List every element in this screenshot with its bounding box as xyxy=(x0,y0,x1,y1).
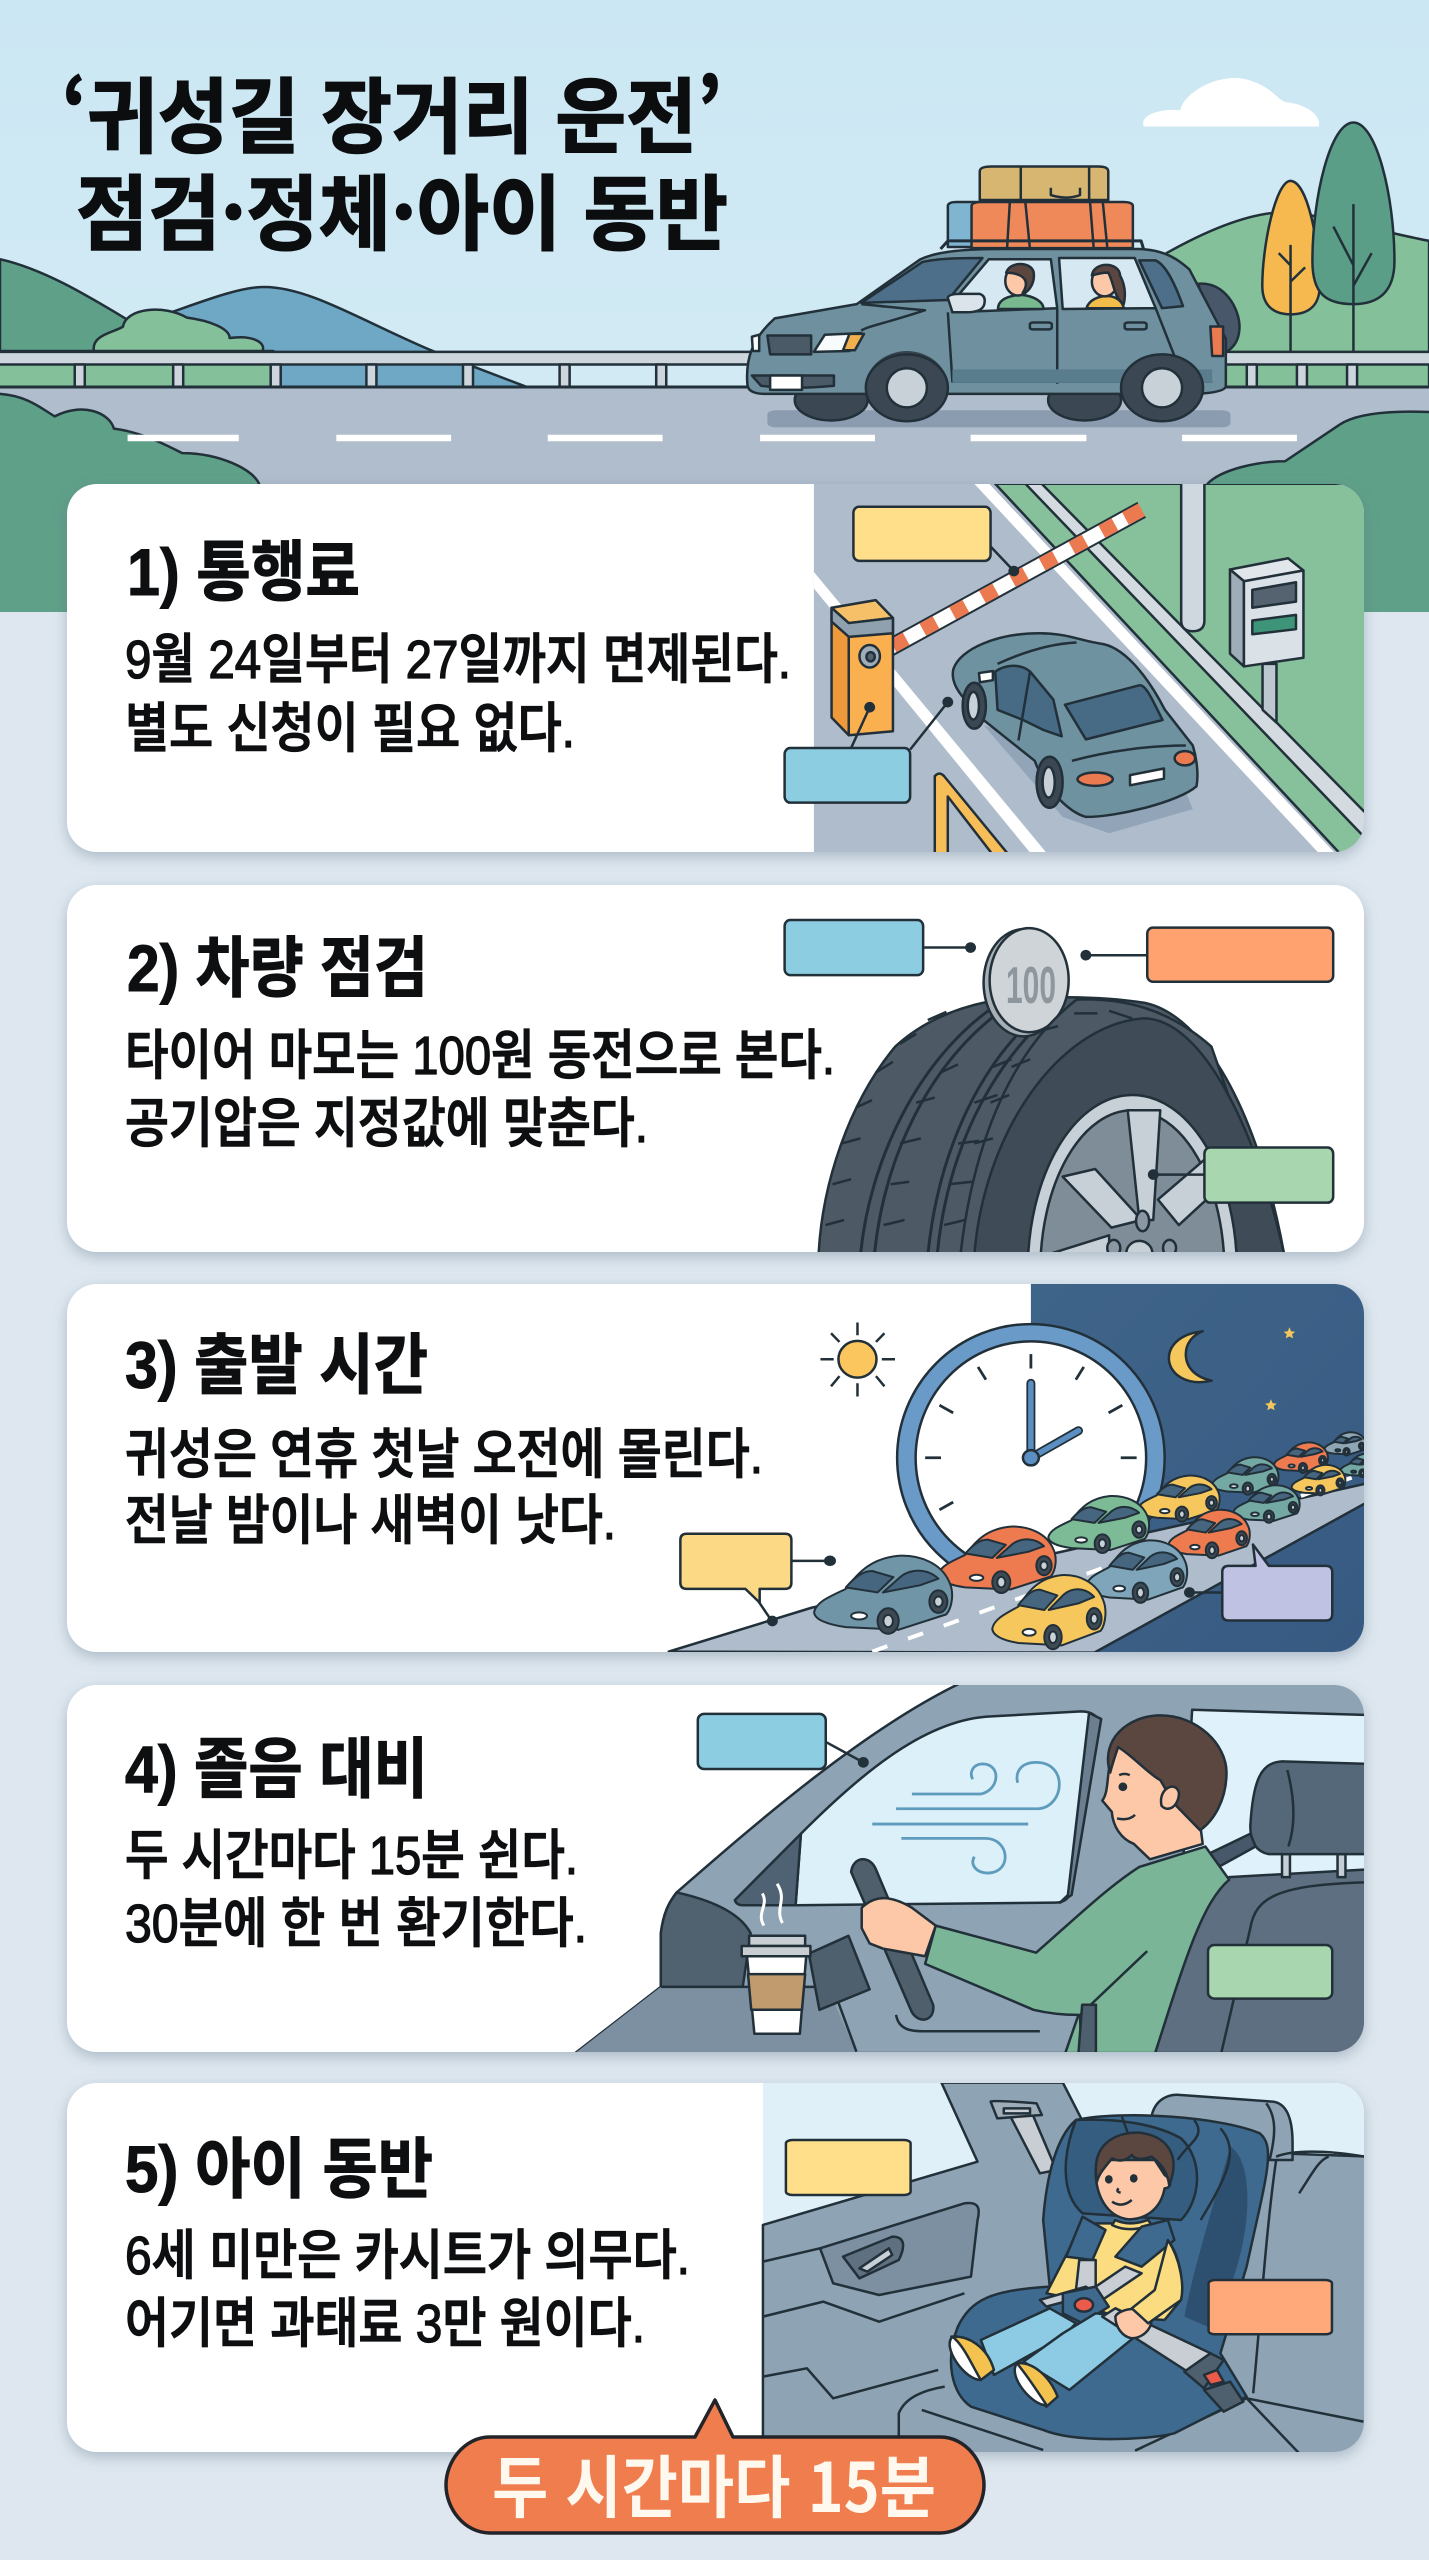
wind lines xyxy=(872,1762,1059,1873)
illustration: tire and coin xyxy=(783,918,1334,1252)
road xyxy=(0,388,1429,484)
label: blue xyxy=(785,920,923,975)
label: green xyxy=(1204,1148,1333,1203)
seat xyxy=(1155,1761,1367,2053)
kiosk xyxy=(1230,558,1303,723)
leader line xyxy=(826,1742,868,1766)
icon: moon xyxy=(1169,1331,1212,1382)
label: blue xyxy=(698,1714,826,1769)
callout: every two hours 15 minutes xyxy=(446,2400,984,2533)
side window xyxy=(1182,1710,1367,1887)
hand xyxy=(862,1898,936,1956)
tree: teal xyxy=(1312,122,1394,352)
body 3: 귀성은 연휴 첫날 오전에 몰린다. xyxy=(125,1425,763,1485)
wheel rim xyxy=(1028,1095,1237,1447)
clock xyxy=(897,1324,1165,1591)
coin value: 100 xyxy=(1006,957,1056,1015)
door panel xyxy=(763,2203,1247,2451)
title xyxy=(62,51,728,267)
panel 2: vehicle check xyxy=(61,884,1370,1263)
leader lines xyxy=(851,547,1018,750)
panel 1: toll fee xyxy=(67,480,1372,858)
body 5 xyxy=(125,2226,690,2354)
cabin xyxy=(575,1682,1367,2053)
bush: right foreground xyxy=(1208,412,1429,637)
tire shoulder and sidewall xyxy=(960,999,1284,1256)
illustration: toll gate and car xyxy=(785,480,1372,858)
bush: left foreground xyxy=(0,394,260,637)
lane dashes xyxy=(128,435,1297,441)
door and pillar xyxy=(763,2083,1371,2453)
icon: sun xyxy=(820,1323,895,1397)
shoulder belt xyxy=(991,2101,1056,2173)
body 3: 전날 밤이나 새벽이 낫다. xyxy=(125,1491,616,1551)
label: lavender speech bubble xyxy=(1185,1544,1332,1621)
coin xyxy=(984,928,1069,1036)
gate arm xyxy=(879,510,1142,654)
label: blue xyxy=(785,748,910,803)
cloud xyxy=(1143,78,1319,127)
guardrail xyxy=(0,352,1429,387)
car seat xyxy=(951,2115,1268,2439)
man xyxy=(925,1715,1229,2053)
rear headrest xyxy=(1151,2095,1293,2160)
heading 4: 4) 졸음 대비 xyxy=(125,1732,428,1806)
body 4: 두 시간마다 15분 쉰다. xyxy=(125,1826,578,1886)
label: orange xyxy=(1147,928,1333,982)
steering column xyxy=(809,1936,870,2010)
label: yellow speech bubble xyxy=(680,1534,835,1625)
person: driver xyxy=(998,264,1044,309)
panel 5: child passenger xyxy=(67,2083,1373,2453)
illustration: clock and traffic xyxy=(669,1284,1382,1654)
callout: every two hours 15 minutes: 두 시간마다 15분 xyxy=(492,2433,936,2532)
tire tread xyxy=(819,997,1284,1256)
icon: stars xyxy=(1265,1327,1295,1410)
gate post xyxy=(832,600,893,735)
title: 점검·정체·아이 동반 xyxy=(76,148,728,267)
illustration: child in car seat xyxy=(763,2083,1373,2453)
heading 2: 2) 차량 점검 xyxy=(127,931,428,1005)
heading 5: 5) 아이 동반 xyxy=(125,2132,433,2206)
body 5: 6세 미만은 카시트가 의무다. xyxy=(125,2226,690,2286)
car: family car with luggage xyxy=(747,167,1240,427)
coffee cup xyxy=(742,1884,810,2034)
steering wheel xyxy=(851,1859,933,2020)
panel 4: drowsiness xyxy=(67,1682,1367,2053)
body 4 xyxy=(125,1826,587,1954)
label: yellow xyxy=(853,507,991,561)
label: yellow xyxy=(786,2140,911,2195)
label: orange xyxy=(1209,2280,1332,2334)
sedan xyxy=(953,633,1197,833)
label: green xyxy=(1208,1945,1332,1999)
body 4: 30분에 한 번 환기한다. xyxy=(125,1894,587,1954)
traffic jam cars xyxy=(814,1432,1382,1649)
illustration: driver in car xyxy=(575,1682,1367,2053)
heading 1: 1) 통행료 xyxy=(127,535,360,609)
body 2: 공기압은 지정값에 맞춘다. xyxy=(125,1094,648,1154)
windshield xyxy=(796,1711,1100,1905)
road marking xyxy=(935,774,1008,854)
header scene: sky, hills, road and car xyxy=(0,0,1429,637)
body 1: 9월 24일부터 27일까지 면제된다. xyxy=(125,630,791,690)
body 2 xyxy=(125,1026,835,1154)
leader lines xyxy=(923,943,1204,1179)
heading 3: 3) 출발 시간 xyxy=(125,1328,428,1402)
road xyxy=(669,1479,1372,1653)
body 3 xyxy=(125,1425,763,1551)
dashboard xyxy=(661,1892,751,1987)
body 1 xyxy=(125,630,791,759)
tree: yellow xyxy=(1262,181,1320,352)
body 1: 별도 신청이 필요 없다. xyxy=(125,699,575,759)
pole xyxy=(1181,480,1204,631)
person: passenger xyxy=(1086,265,1125,308)
child xyxy=(950,2133,1243,2412)
body 2: 타이어 마모는 100원 동전으로 본다. xyxy=(125,1026,835,1086)
title: ‘귀성길 장거리 운전’ xyxy=(62,51,722,170)
body 5: 어기면 과태료 3만 원이다. xyxy=(125,2294,645,2354)
panel 3: departure time xyxy=(67,1284,1382,1654)
